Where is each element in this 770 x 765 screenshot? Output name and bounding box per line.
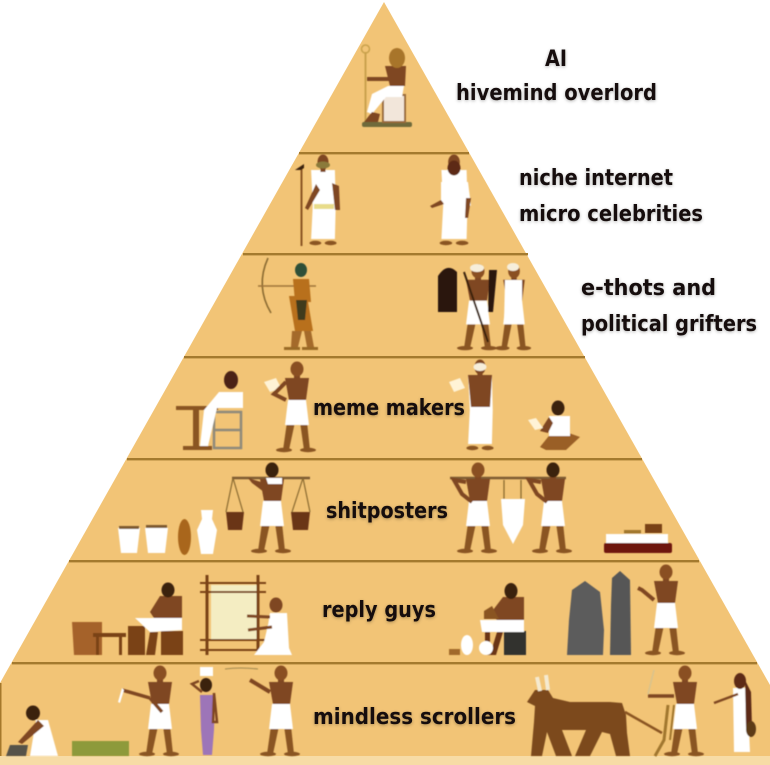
figure: kneeling woman at grindstone	[6, 706, 58, 756]
figure: official in white robe	[430, 154, 471, 245]
stacked goods	[604, 524, 672, 553]
label: reply guys: reply guys	[322, 598, 436, 623]
figure: two soldiers with shield	[438, 263, 531, 350]
figure: potter	[449, 583, 526, 655]
label: shitposters: shitposters	[326, 499, 448, 524]
labels	[313, 47, 757, 730]
figure: scribe with long kilt	[449, 360, 494, 450]
figure: craftsman at bench	[72, 582, 183, 655]
label: hivemind overlord: hivemind overlord	[456, 81, 657, 106]
figure: man with whip	[225, 666, 300, 756]
bottom ground band	[0, 756, 770, 765]
label: micro celebrities: micro celebrities	[519, 202, 703, 227]
figure: man with balance scale	[226, 462, 310, 553]
figure: noble with staff	[295, 154, 340, 246]
figure: archer	[258, 258, 318, 350]
figure: kneeling weaver	[247, 598, 292, 655]
figure: woman in white dress	[714, 673, 756, 752]
label: e-thots and: e-thots and	[581, 276, 716, 301]
figure: sculptor	[638, 564, 685, 655]
label: mindless scrollers: mindless scrollers	[313, 705, 516, 730]
figure: ox pulling plow	[527, 675, 674, 756]
figure: two porters carrying a sack	[450, 462, 572, 553]
label: niche internet: niche internet	[519, 166, 673, 191]
label: AI: AI	[545, 47, 567, 72]
figure: plowman	[648, 666, 704, 756]
figure: scribe at desk	[176, 371, 243, 450]
jars	[118, 510, 217, 555]
figure: man with scroll	[264, 362, 316, 452]
figure: man with hoe	[118, 666, 179, 756]
figure: seated scribe reading	[528, 400, 580, 450]
figure: woman in purple dress	[192, 667, 217, 755]
stone statues	[567, 571, 631, 655]
label: meme makers: meme makers	[313, 396, 465, 421]
grain field	[72, 741, 129, 756]
tier divider lines	[12, 152, 757, 664]
loom	[200, 575, 266, 655]
figure: seated pharaoh	[362, 45, 412, 127]
